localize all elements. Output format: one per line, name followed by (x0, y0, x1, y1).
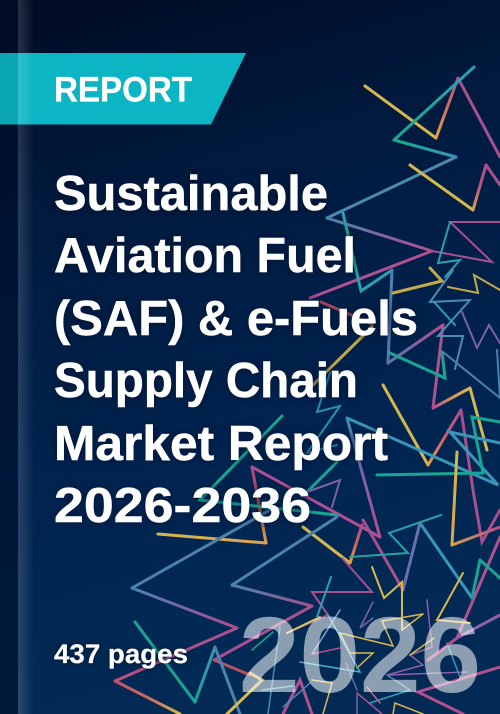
page count: 437 pages (54, 639, 188, 669)
title: Aviation Fuel (54, 229, 356, 283)
report ribbon (0, 53, 246, 124)
title: Supply Chain (54, 354, 358, 408)
medium lines (287, 222, 500, 633)
title: (SAF) & e-Fuels (54, 292, 418, 346)
report ribbon: REPORT (54, 70, 192, 110)
title: 2026-2036 (54, 479, 311, 533)
geometric line pattern (115, 67, 500, 714)
title (54, 167, 418, 533)
year watermark: 2026 (239, 594, 481, 714)
title: Sustainable (54, 167, 328, 221)
title: Market Report (54, 417, 388, 471)
thin lines (252, 600, 467, 714)
thick lines (115, 67, 500, 714)
